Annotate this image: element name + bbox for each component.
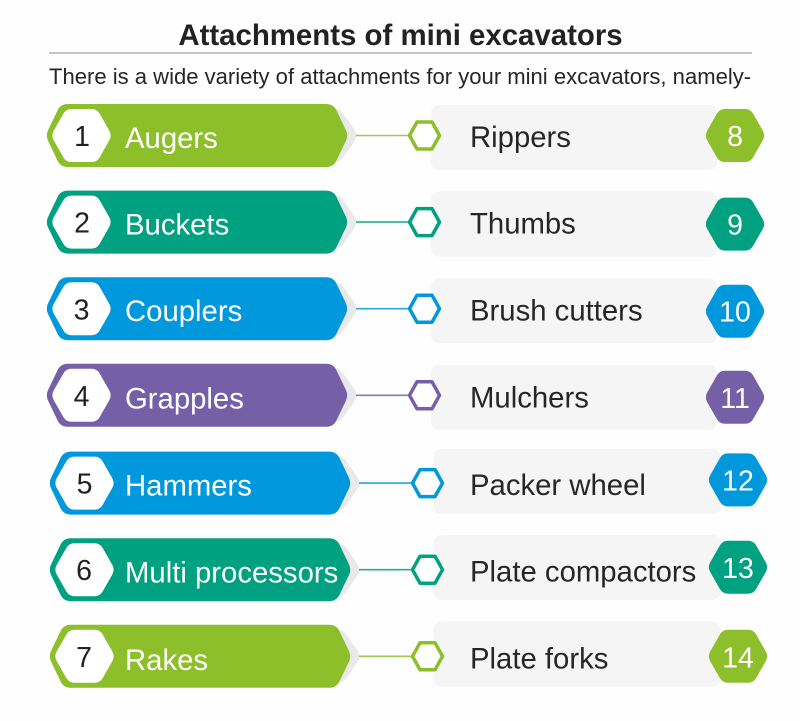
card: Packer wheel [434,449,720,514]
number hexagon 3 [52,282,111,335]
panel: Multi processors [50,538,350,601]
connector hexagon [412,556,442,583]
number hexagon 8 [706,109,764,162]
label Brush cutters: Brush cutters [470,295,643,328]
shadow tab [333,629,360,684]
title: Attachments of mini excavators [178,19,623,52]
number 10: 10 [719,297,751,329]
number hexagon 13 [709,541,767,594]
connector [356,221,409,223]
card: Mulchers [431,365,717,430]
number 6: 6 [76,555,92,587]
card: Plate compactors [434,535,720,600]
label Hammers: Hammers [125,470,252,503]
row 1: Augers and Rippers [47,104,764,170]
connector [356,308,409,310]
label Buckets: Buckets [125,209,229,242]
number 2: 2 [74,208,90,240]
label Couplers: Couplers [125,295,242,328]
card: Plate forks [434,622,720,687]
row 6: Multi processors and Plate compactors [50,535,767,601]
connector hexagon [410,382,440,409]
connector [359,655,412,657]
number 4: 4 [74,381,90,413]
row 5: Hammers and Packer wheel [50,449,767,515]
shadow tab [333,456,360,511]
connector hexagon [412,470,442,497]
number hexagon 10 [706,285,764,338]
shadow tab [333,542,360,597]
number 13: 13 [722,553,754,585]
number hexagon 14 [709,630,767,683]
card: Rippers [431,105,717,170]
shadow tab [330,195,356,250]
shadow tab [330,368,356,423]
number hexagon 1 [52,109,111,162]
label Multi processors: Multi processors [125,557,338,590]
number hexagon 4 [52,369,111,422]
connector [356,394,409,396]
label Mulchers: Mulchers [470,381,589,414]
number 5: 5 [77,469,92,501]
panel: Grapples [47,364,347,427]
row 3: Couplers and Brush cutters [47,277,764,343]
label Rippers: Rippers [470,121,571,154]
label Grapples: Grapples [125,382,244,415]
panel: Hammers [50,452,350,515]
number 9: 9 [727,210,743,242]
number 7: 7 [76,642,92,674]
number 8: 8 [727,121,743,153]
connector [359,569,412,571]
row 2: Buckets and Thumbs [47,191,764,257]
connector hexagon [410,122,440,149]
label Packer wheel: Packer wheel [470,469,646,502]
number hexagon 9 [706,198,764,251]
label Augers: Augers [125,122,218,155]
panel: Augers [47,104,347,167]
panel: Buckets [47,191,347,254]
connector [356,134,409,136]
number hexagon 2 [52,196,111,249]
number hexagon 11 [706,371,764,424]
label Plate forks: Plate forks [470,642,608,675]
connector [359,482,412,484]
connector hexagon [412,643,442,670]
shadow tab [330,281,356,336]
card: Thumbs [431,192,717,257]
row 7: Rakes and Plate forks [50,622,767,688]
label Thumbs: Thumbs [470,208,576,241]
number hexagon 12 [709,453,767,506]
card: Brush cutters [431,278,717,343]
intro text: There is a wide variety of attachments for your mini excavators, namely- [49,64,751,89]
panel: Couplers [47,277,347,340]
number 12: 12 [722,466,754,498]
label Plate compactors: Plate compactors [470,556,696,589]
number 14: 14 [722,642,754,674]
shadow tab [330,108,356,163]
number 3: 3 [74,295,89,327]
number 11: 11 [720,383,750,415]
connector hexagon [410,295,440,322]
label Rakes: Rakes [125,644,208,677]
connector hexagon [410,209,440,236]
number hexagon 5 [55,457,114,510]
panel: Rakes [50,625,350,688]
number 1: 1 [74,121,90,153]
row 4: Grapples and Mulchers [47,364,764,430]
number hexagon 7 [55,630,114,683]
number hexagon 6 [55,543,114,596]
